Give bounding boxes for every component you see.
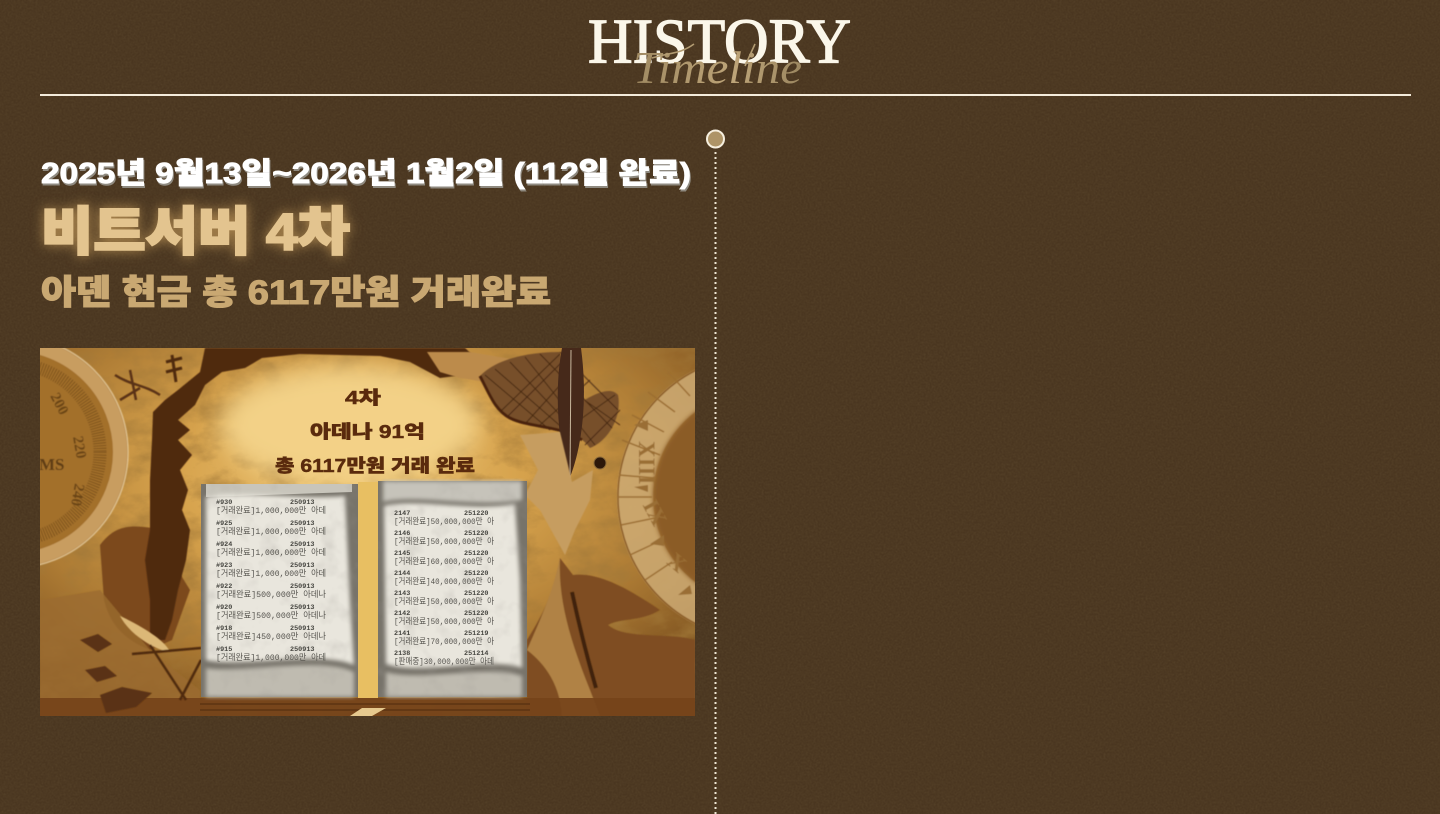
date range: 2025년 9월13일~2026년 1월2일 (112일 완료) [41, 157, 691, 190]
fishing net [480, 352, 620, 448]
left trade record scroll: [거래완료]1,000,000만 아데 [216, 568, 326, 579]
left trade record scroll: [거래완료]500,000만 아데나 [216, 610, 326, 621]
right trade record scroll: 2142 [394, 610, 410, 618]
left trade record scroll: [거래완료]1,000,000만 아데 [216, 652, 326, 663]
left trade record scroll: [거래완료]450,000만 아데나 [216, 631, 326, 642]
right trade record scroll: 251220 [464, 510, 488, 518]
header rule [40, 94, 1411, 96]
right trade record scroll: 251220 [464, 610, 488, 618]
timeline dotted line [714, 152, 716, 814]
right trade record scroll: 2141 [394, 630, 410, 638]
left trade record scroll: 250913 [290, 583, 314, 591]
image heading [275, 388, 475, 476]
heading: server name: 비트서버 4차 [41, 204, 350, 262]
left trade record scroll: [거래완료]500,000만 아데나 [216, 589, 326, 600]
right trade record scroll: 251220 [464, 590, 488, 598]
right trade record scroll: 2138 [394, 650, 410, 658]
left trade record scroll: #918 [216, 625, 232, 633]
right trade record scroll: [거래완료]50,000,000만 아 [394, 596, 494, 607]
parchment base [40, 348, 695, 716]
feather and pens [80, 616, 201, 713]
left trade record scroll: 250913 [290, 646, 314, 654]
right trade record scroll: 2146 [394, 530, 410, 538]
right trade record scroll: 2147 [394, 510, 410, 518]
compass dial [40, 348, 130, 566]
left trade record scroll: #922 [216, 583, 232, 591]
right trade record scroll: 251220 [464, 530, 488, 538]
compass dial: 200 [46, 390, 71, 418]
left trade record scroll: #920 [216, 604, 232, 612]
left trade record scroll: 250913 [290, 562, 314, 570]
image heading: 4차 [345, 388, 382, 408]
title: History Timeline: Timeline [633, 43, 802, 93]
compass dial: MS [39, 455, 64, 474]
image heading: 아데나 91억 [310, 422, 425, 442]
right trade record scroll: [거래완료]70,000,000만 아 [394, 636, 494, 647]
right trade record scroll: 251219 [464, 630, 488, 638]
right trade record scroll: [거래완료]50,000,000만 아 [394, 516, 494, 527]
timeline node [707, 130, 724, 148]
lower left land [40, 526, 192, 698]
left trade record scroll: #915 [216, 646, 232, 654]
right trade record scroll: 251214 [464, 650, 488, 658]
subtitle: trade total: 아덴 현금 총 6117만원 거래완료 [41, 274, 551, 312]
dark coastline [115, 348, 478, 640]
right trade record scroll: [거래완료]60,000,000만 아 [394, 556, 494, 567]
right trade record scroll: 2144 [394, 570, 410, 578]
left trade record scroll: #925 [216, 520, 232, 528]
torn leaf map [426, 351, 508, 381]
right trade record scroll: 2143 [394, 590, 410, 598]
right trade record scroll: [거래완료]50,000,000만 아 [394, 616, 494, 627]
right trade record scroll: [판매중]30,000,000만 아데 [394, 656, 494, 667]
left trade record scroll: #924 [216, 541, 232, 549]
right trade record scroll: [거래완료]40,000,000만 아 [394, 576, 494, 587]
compass dial: 220 [69, 435, 89, 460]
tan peninsula [520, 432, 593, 555]
left trade record scroll: [거래완료]1,000,000만 아데 [216, 526, 326, 537]
right trade record scroll: [거래완료]50,000,000만 아 [394, 536, 494, 547]
left trade record scroll: [거래완료]1,000,000만 아데 [216, 547, 326, 558]
image panel: antique map with trade records [40, 348, 695, 716]
left trade record scroll: #923 [216, 562, 232, 570]
clock dial: IX [638, 496, 672, 530]
clock dial [617, 370, 695, 624]
clock dial: X [663, 548, 692, 578]
image heading: 총 6117만원 거래 완료 [275, 456, 475, 476]
left trade record scroll: 250913 [290, 499, 314, 507]
left trade record scroll: 250913 [290, 520, 314, 528]
left trade record scroll: [거래완료]1,000,000만 아데 [216, 505, 326, 516]
wooden bottom strip [40, 698, 695, 716]
right trade record scroll [378, 481, 527, 697]
right trade record scroll: 251220 [464, 570, 488, 578]
right trade record scroll: 2145 [394, 550, 410, 558]
left trade record scroll: #930 [216, 499, 232, 507]
title: History Timeline: HISTORY [588, 6, 851, 76]
right trade record scroll: 251220 [464, 550, 488, 558]
feather quill [558, 348, 606, 482]
left trade record scroll: 250913 [290, 541, 314, 549]
clock dial: XIII [634, 441, 659, 485]
left trade record scroll [201, 484, 358, 697]
left trade record scroll: 250913 [290, 625, 314, 633]
compass dial: 240 [67, 482, 87, 507]
rocky lower right land [527, 558, 695, 698]
left trade record scroll: 250913 [290, 604, 314, 612]
